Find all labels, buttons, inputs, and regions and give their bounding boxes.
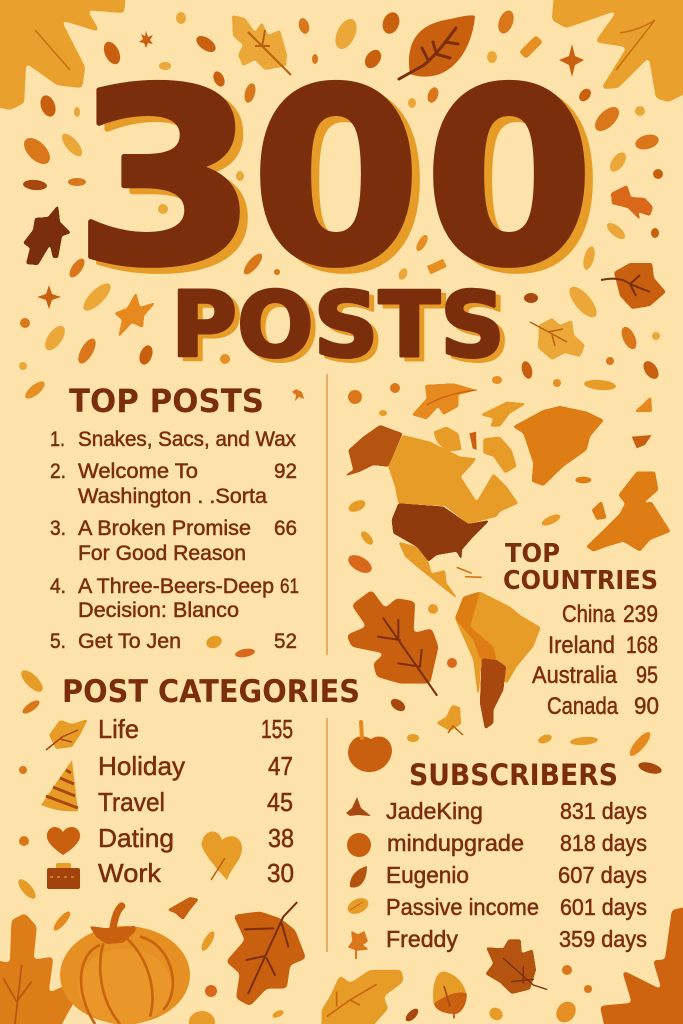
panel: top countries [503,539,659,720]
list: top posts: Decision: Blanco [78,599,239,622]
map: alaska [342,425,403,477]
icon: acorn [433,972,467,1018]
list: top countries: 239 [623,601,658,628]
map: greenland [513,406,604,486]
list: post categories: Life [98,714,139,744]
icon: mindupgrade circle [347,833,371,857]
list: post categories [98,714,294,888]
list: top countries: Ireland [548,632,615,659]
leaf: orange right [611,185,653,221]
leaf: small light bottom [189,1011,215,1024]
heading: top countries: TOP [505,539,560,569]
title: 300: 3 [81,43,266,325]
divider upper [326,374,328,655]
map: south america [455,592,541,700]
icon: apple [348,722,392,772]
divider lower [326,718,328,952]
list: top posts: 66 [274,517,297,540]
list: post categories: Dating [98,823,174,853]
list: post categories: Holiday [98,751,185,781]
icon: briefcase [47,863,80,889]
map: argentina [480,658,506,729]
leaf: top left corner [0,0,128,110]
panel: top countries: COUNTRIES [503,566,658,596]
map: arctic islands [433,402,527,473]
list: post categories: 45 [267,787,293,817]
map: usa [392,503,490,562]
list: subscribers [386,798,647,952]
list: top posts: For Good Reason [78,542,246,565]
map: mexico [398,542,459,601]
map: iceland [575,477,591,483]
list: top posts: 92 [274,460,297,483]
icon: life leaf [46,719,88,750]
list: top posts: 3. [50,517,66,540]
panel: subscribers [345,758,647,959]
list: subscribers: mindupgrade [387,830,524,856]
icon: freddy leaf [349,932,367,959]
heading: top posts: TOP POSTS [69,382,264,420]
map: caribbean [457,567,482,577]
list: top posts: Washington . .Sorta [78,485,267,508]
icon: passive income leaf [345,895,371,917]
leaf: light lower right [530,318,585,360]
list: subscribers: JadeKing [386,798,483,824]
leaf: light bottom centre [322,970,403,1024]
sparkle stars: top [37,31,584,309]
icon: eugenio leaf [350,866,367,888]
leaf: bottom left corner [0,913,78,1024]
title: 300: 00 [251,38,594,320]
list: top posts: 61 [280,575,299,598]
leaf: large brown oak centre [347,590,438,695]
map: russia fragment [632,435,652,448]
list: post categories: 38 [268,823,294,853]
list: subscribers: 607 days [558,862,647,888]
leaf: dark oak left [23,205,71,265]
leaf: top right corner [552,0,683,102]
leaf: light oak top [232,15,291,75]
leaf: brown right [601,263,666,309]
list: top posts: 5. [50,630,66,653]
list: top posts: 2. [50,460,66,483]
list: top posts: 52 [274,630,297,653]
leaf: orange star leaf left [114,292,156,338]
list: top posts: Welcome To [78,460,198,483]
list: top countries: 168 [626,632,658,659]
list: post categories: 30 [267,858,294,888]
heading: subscribers: SUBSCRIBERS [409,758,618,792]
list: top posts: 4. [50,575,66,598]
icon: heart [47,827,80,855]
scattered petals: around map [345,376,663,1024]
list: post categories: 47 [268,751,293,781]
list: top posts: Get To Jen [78,630,181,653]
leaf: bottom right corner [600,900,683,1024]
map: andes region [455,592,497,660]
panel: post categories [41,674,360,889]
icon: jadeking leaf [346,797,371,816]
title: 300 [73,37,602,326]
title: POSTS: POSTS [171,273,505,378]
list: top countries [532,601,659,720]
title: 300: 00 [259,44,602,326]
pumpkin [60,906,190,1024]
list: subscribers: Eugenio [386,862,469,888]
list: subscribers: 601 days [560,894,647,920]
list: subscribers: 818 days [560,830,647,856]
title: POSTS: POSTS [176,277,510,382]
list: subscribers: 831 days [560,798,647,824]
list: top posts: Snakes, Sacs, and Wax [78,428,296,451]
list: subscribers: 359 days [559,926,647,952]
list: top countries: China [562,601,616,628]
list: top countries: 90 [634,693,659,720]
map: canada [388,435,518,524]
list: top posts: 1. [50,428,65,451]
list: post categories: 155 [261,714,293,744]
leaf: brown top [399,15,475,79]
leaf: small light below map [436,705,463,735]
list: top posts: A Broken Promise [78,517,251,540]
list: top countries: 95 [636,662,658,689]
list: top countries: Canada [547,693,619,720]
list: top countries: Australia [532,662,618,689]
heading: post categories: POST CATEGORIES [62,674,360,710]
map: europe [586,472,671,552]
list: top posts: A Three-Beers-Deep [78,575,274,598]
world map [342,402,671,729]
scattered petals: middle left [15,378,304,1019]
list: top posts [50,428,299,653]
list: post categories: Travel [98,787,165,817]
list: post categories: Work [98,858,162,888]
leaf: small orange above map [412,383,477,419]
leaf: brown oak bottom [226,903,306,1006]
map: britain [592,501,607,520]
leaf: brown oak lower right [485,939,547,994]
list: subscribers: Passive income [386,894,539,920]
icon: party hat [41,760,78,811]
leaf: light heart [201,832,242,880]
scattered petals: top [19,8,663,382]
panel: top posts [50,382,299,653]
list: subscribers: Freddy [386,926,458,952]
title: 300: 3 [73,37,258,319]
